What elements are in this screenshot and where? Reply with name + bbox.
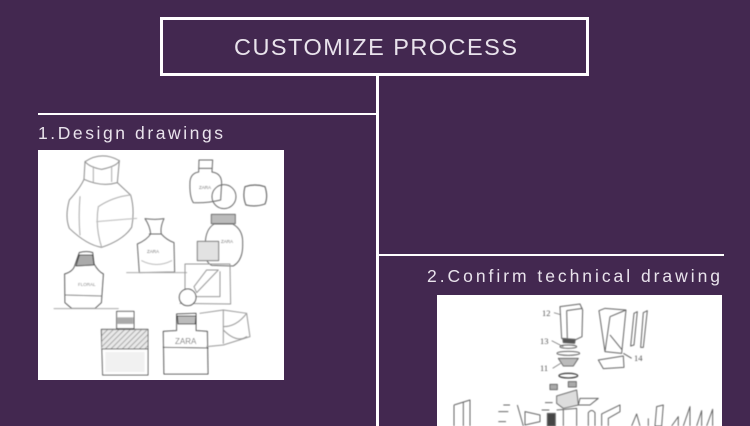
sketch labels: ZARA [147, 249, 159, 254]
part numbers: 13 [540, 336, 548, 346]
sketch labels [78, 185, 233, 346]
step 1 heading: 1.Design drawings [38, 123, 223, 143]
exploded view parts [454, 304, 713, 426]
timeline connector lines [38, 75, 724, 426]
sketch: bottom ZARA bottle [163, 310, 250, 374]
sketch labels: FLORAL [78, 282, 96, 287]
part numbers: 14 [634, 353, 643, 363]
part numbers [540, 308, 643, 373]
panel: technical drawing [437, 295, 722, 426]
sketch: box with circle [179, 264, 231, 306]
sketch labels: ZARA [221, 239, 233, 244]
panel: design sketches [38, 150, 284, 380]
sketch: left bottle [54, 252, 118, 309]
sketch labels: ZARA [199, 185, 211, 190]
sketch: small bottle top right [190, 160, 267, 209]
sketch: large bottle [67, 156, 137, 247]
sketch: middle bottle [127, 219, 187, 273]
sketch: jar with cap [197, 214, 243, 266]
sketch: bottom hatched bottle [101, 311, 148, 375]
step 2 heading: 2.Confirm technical drawing [427, 266, 720, 286]
title box [162, 18, 588, 74]
part numbers: 12 [542, 308, 550, 318]
title box: CUSTOMIZE PROCESS [234, 34, 517, 60]
part numbers: 11 [540, 363, 548, 373]
sketch labels: ZARA [175, 337, 197, 346]
